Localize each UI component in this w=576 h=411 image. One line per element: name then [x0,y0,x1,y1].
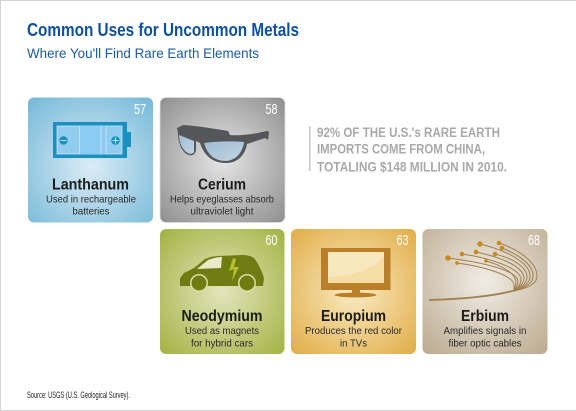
callout: China imports: 92% OF THE U.S.'s RARE EARTH [317,125,500,140]
description: Used as magnets [185,325,259,337]
description: Amplifies signals in [444,325,527,337]
description: batteries [72,206,110,218]
icon: sunglasses [177,125,269,163]
description: Produces the red color [305,325,402,337]
description [185,325,259,350]
icon: hybrid car [180,255,264,292]
atomic number 68: 68 [528,232,540,249]
element name: Cerium [198,176,246,194]
element name: Europium [321,308,386,325]
subtitle: Where You'll Find Rare Earth Elements [27,45,259,61]
atomic number 57: 57 [134,101,146,118]
description [170,194,274,218]
callout: China imports [309,125,507,174]
title: Common Uses for Uncommon Metals [27,19,299,40]
icon: television [321,248,390,297]
panel: Cerium [160,98,285,222]
atomic number 60: 60 [266,232,278,249]
description: fiber optic cables [448,338,522,350]
callout: China imports: TOTALING $148 MILLION IN 2010. [317,160,507,174]
icon: fiber optic cables [429,241,537,300]
description: Helps eyeglasses absorb [170,194,274,206]
source note: Source: USGS (U.S. Geological Survey). [27,390,130,400]
description: in TVs [340,338,367,350]
atomic number 63: 63 [396,232,408,249]
element name: Erbium [461,308,509,325]
icon: battery [53,122,131,158]
description [46,194,136,218]
panel: Neodymium [160,229,284,354]
atomic number 58: 58 [266,101,278,118]
panel: Erbium [422,229,548,354]
callout: China imports: IMPORTS COME FROM CHINA, [317,142,485,156]
description: Used in rechargeable [46,194,136,206]
description [444,325,527,350]
panel: Lanthanum [28,98,153,222]
element name: Neodymium [182,308,262,325]
element name: Lanthanum [52,176,129,194]
description: ultraviolet light [190,206,254,218]
description [305,325,402,350]
panel: Europium [291,229,416,354]
description: for hybrid cars [191,338,253,350]
